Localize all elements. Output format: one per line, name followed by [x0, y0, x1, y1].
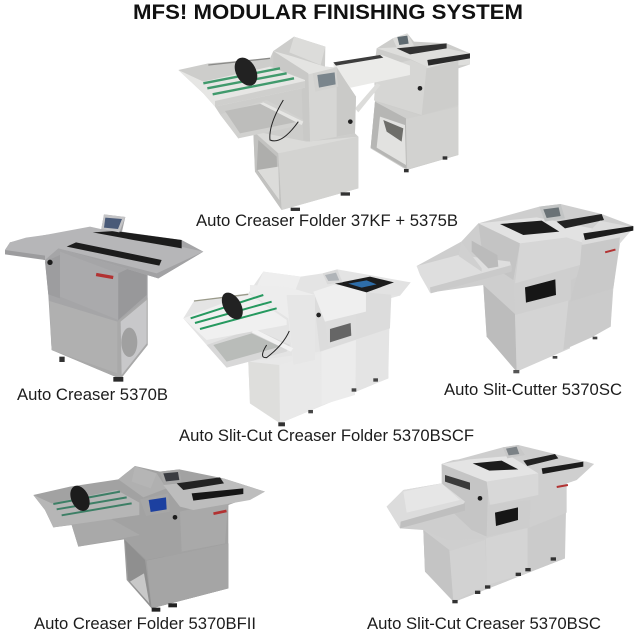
label: Auto Creaser 5370B: Auto Creaser 5370B: [17, 385, 168, 404]
label: Auto Slit-Cut Creaser 5370BSC: Auto Slit-Cut Creaser 5370BSC: [367, 614, 601, 633]
label: Auto Slit-Cut Creaser Folder 5370BSCF: Auto Slit-Cut Creaser Folder 5370BSCF: [179, 426, 474, 445]
machine: Auto Creaser Folder 5370BFII: [33, 466, 265, 612]
machine: Auto Slit-Cutter 5370SC: [417, 204, 634, 373]
label: Auto Creaser Folder 37KF + 5375B: Auto Creaser Folder 37KF + 5375B: [196, 211, 458, 230]
machine: Auto Creaser Folder 37KF + 5375B: [178, 33, 470, 211]
machine: Auto Slit-Cut Creaser 5370BSC: [387, 445, 594, 603]
label: Auto Creaser Folder 5370BFII: Auto Creaser Folder 5370BFII: [34, 614, 256, 633]
machine: Auto Creaser 5370B: [5, 214, 203, 382]
label: Auto Slit-Cutter 5370SC: Auto Slit-Cutter 5370SC: [444, 380, 622, 399]
machine: Auto Slit-Cut Creaser Folder 5370BSCF: [183, 269, 411, 426]
title: MFS! MODULAR FINISHING SYSTEM: [133, 1, 523, 24]
